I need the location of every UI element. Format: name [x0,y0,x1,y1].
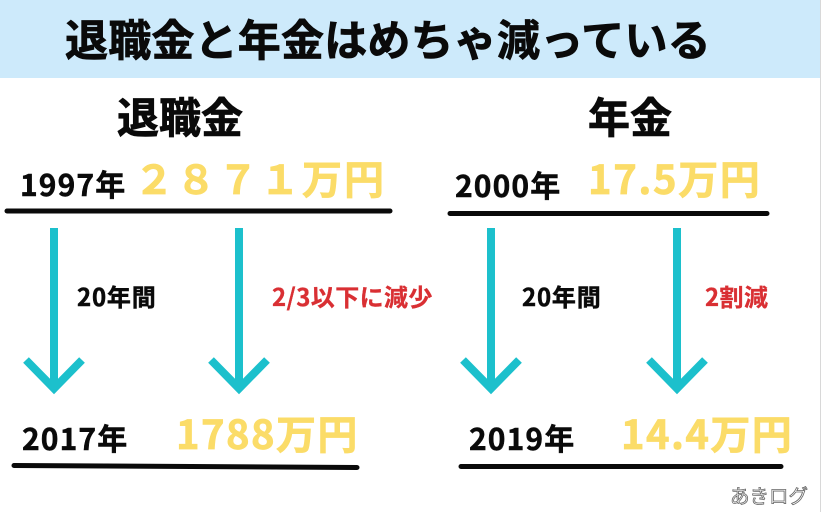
value: 14.4: 14.4万円 [621,403,793,461]
value: 17.5: 17.5万円 [588,148,761,206]
label: 2000: 2000年 [455,162,561,206]
heading: retirement: 退職金 [117,85,243,146]
label: 2019: 2019年 [469,415,575,459]
title banner [0,0,821,78]
heading: pension: 年金 [588,85,672,146]
label: 20 years left: 20年間 [77,278,157,313]
arrows [26,228,705,388]
value: 1788: 1788万円 [176,403,359,461]
label: 2017: 2017年 [22,415,128,459]
callout: reduction: 2/3以下に減少 [272,278,433,313]
value: 2871: ２８７１万円 [134,148,386,206]
title: 退職金と年金はめちゃ減っている [65,7,711,69]
callout: 20 percent cut: 2割減 [705,278,768,313]
underlines [7,211,781,468]
page edge line [820,0,821,512]
label: 20 years right: 20年間 [522,278,602,313]
label: 1997: 1997年 [20,161,126,205]
watermark: あきログ [730,480,808,509]
